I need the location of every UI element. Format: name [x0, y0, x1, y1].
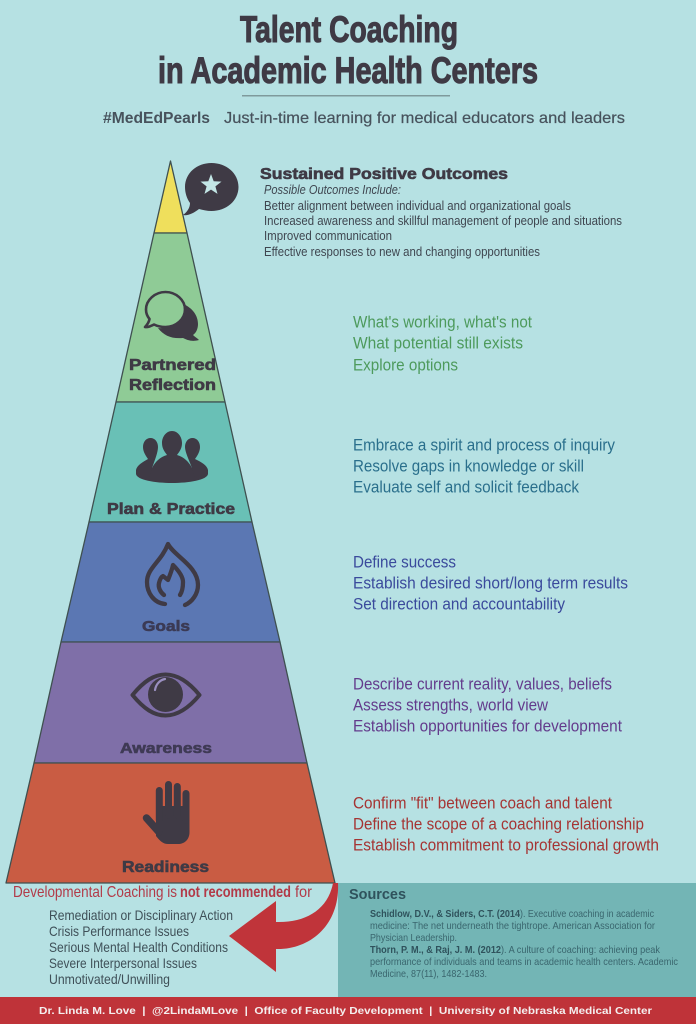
list: not recommended conditions: Remediation or Disciplinary Action	[49, 907, 233, 923]
heading: sources: Sources	[349, 886, 406, 903]
label: plan and practice: Plan & Practice	[107, 501, 235, 518]
subtitle: #MedEdPearls	[103, 110, 210, 127]
tier: readiness	[6, 763, 335, 883]
text block: goals details: Establish desired short/long term results	[353, 574, 628, 592]
icon: conversation bubbles	[145, 292, 199, 341]
text block: plan and practice details: Evaluate self and solicit feedback	[353, 478, 579, 496]
list: not recommended conditions: Unmotivated/Unwilling	[49, 971, 170, 987]
text block: sustained positive outcomes	[260, 166, 622, 259]
title	[158, 9, 538, 91]
text block: partnered reflection details: Explore options	[353, 356, 458, 374]
icon: speech bubble with star	[183, 163, 238, 215]
text block: sustained positive outcomes: Improved communication	[264, 228, 392, 243]
label: partnered reflection: Partnered	[129, 357, 216, 374]
pyramid	[6, 161, 335, 883]
panel: not recommended	[13, 884, 313, 987]
text block: plan and practice details	[353, 436, 615, 496]
footer bar	[0, 997, 696, 1024]
text block: sustained positive outcomes: Possible Outcomes Include:	[264, 182, 401, 197]
icon: raised hand	[146, 784, 190, 844]
subtitle: Just-in-time learning for medical educators and leaders	[224, 110, 625, 127]
text block: plan and practice details: Resolve gaps in knowledge or skill	[353, 456, 584, 476]
label: partnered reflection	[129, 357, 216, 394]
tier: sustained outcomes	[154, 161, 187, 233]
label: awareness: Awareness	[120, 740, 212, 757]
citations	[370, 908, 678, 980]
text block: awareness details	[353, 674, 622, 736]
text block: partnered reflection details	[353, 312, 532, 374]
text block: readiness details: Establish commitment to professional growth	[353, 836, 659, 854]
heading: outcomes: Sustained Positive Outcomes	[260, 166, 508, 183]
text block: goals details	[353, 552, 628, 614]
citations: Schidlow, D.V., & Siders, C.T. (2014	[370, 908, 520, 920]
tier: goals	[61, 522, 280, 642]
arrow: curved red arrow	[229, 883, 338, 972]
panel: sources	[338, 883, 696, 997]
text block: readiness details: Define the scope of a coaching relationship	[353, 814, 644, 834]
heading: not recommended	[13, 884, 313, 901]
citations: medicine: The net underneath the tightrope. American Association for	[370, 920, 655, 932]
text block: partnered reflection details: What's working, what's not	[353, 312, 532, 332]
title: in Academic Health Centers	[158, 50, 538, 91]
text block: goals details: Define success	[353, 552, 456, 572]
label: goals: Goals	[142, 618, 190, 635]
citations: Physician Leadership.	[370, 932, 457, 944]
text block: sustained positive outcomes: Increased awareness and skillful management of people and situations	[264, 213, 622, 228]
heading: not recommended: not recommended	[180, 884, 291, 901]
text block: awareness details: Assess strengths, world view	[353, 696, 549, 714]
heading: not recommended: Developmental Coaching is	[13, 884, 177, 901]
text block: sustained positive outcomes: Effective responses to new and changing opportunities	[264, 244, 540, 259]
title: Talent Coaching	[240, 9, 458, 50]
text block: plan and practice details: Embrace a spirit and process of inquiry	[353, 436, 615, 454]
tier: awareness	[34, 642, 307, 763]
list: not recommended conditions: Serious Mental Health Conditions	[49, 939, 228, 955]
heading: not recommended: for	[295, 884, 313, 901]
icon: flame	[147, 544, 198, 605]
tier: partnered reflection	[116, 233, 225, 402]
footer credits: Dr. Linda M. Love | @2LindaMLove | Office of Faculty Development | University of Nebraska Medical Center	[39, 1005, 652, 1017]
citations: ). A culture of coaching: achieving peak	[501, 944, 661, 956]
list: not recommended conditions: Severe Interpersonal Issues	[49, 955, 197, 971]
list: not recommended conditions	[49, 907, 233, 987]
text block: partnered reflection details: What potential still exists	[353, 334, 523, 352]
icon: eye	[132, 674, 200, 716]
text block: awareness details: Establish opportunities for development	[353, 716, 622, 736]
list: not recommended conditions: Crisis Performance Issues	[49, 923, 189, 939]
label: partnered reflection: Reflection	[129, 377, 216, 394]
text block: readiness details	[353, 794, 659, 854]
tier: plan and practice	[89, 402, 252, 522]
citations: Medicine, 87(11), 1482-1483.	[370, 968, 487, 980]
citations: Thorn, P. M., & Raj, J. M. (2012	[370, 944, 501, 956]
text block: awareness details: Describe current reality, values, beliefs	[353, 674, 612, 694]
text block: sustained positive outcomes: Better alignment between individual and organizational goals	[264, 198, 571, 213]
label: readiness: Readiness	[122, 859, 209, 876]
citations: ). Executive coaching in academic	[520, 908, 654, 920]
text block: readiness details: Confirm "fit" between coach and talent	[353, 794, 612, 812]
icon: group of people	[136, 431, 208, 483]
header	[103, 9, 625, 127]
text block: goals details: Set direction and accountability	[353, 594, 565, 614]
